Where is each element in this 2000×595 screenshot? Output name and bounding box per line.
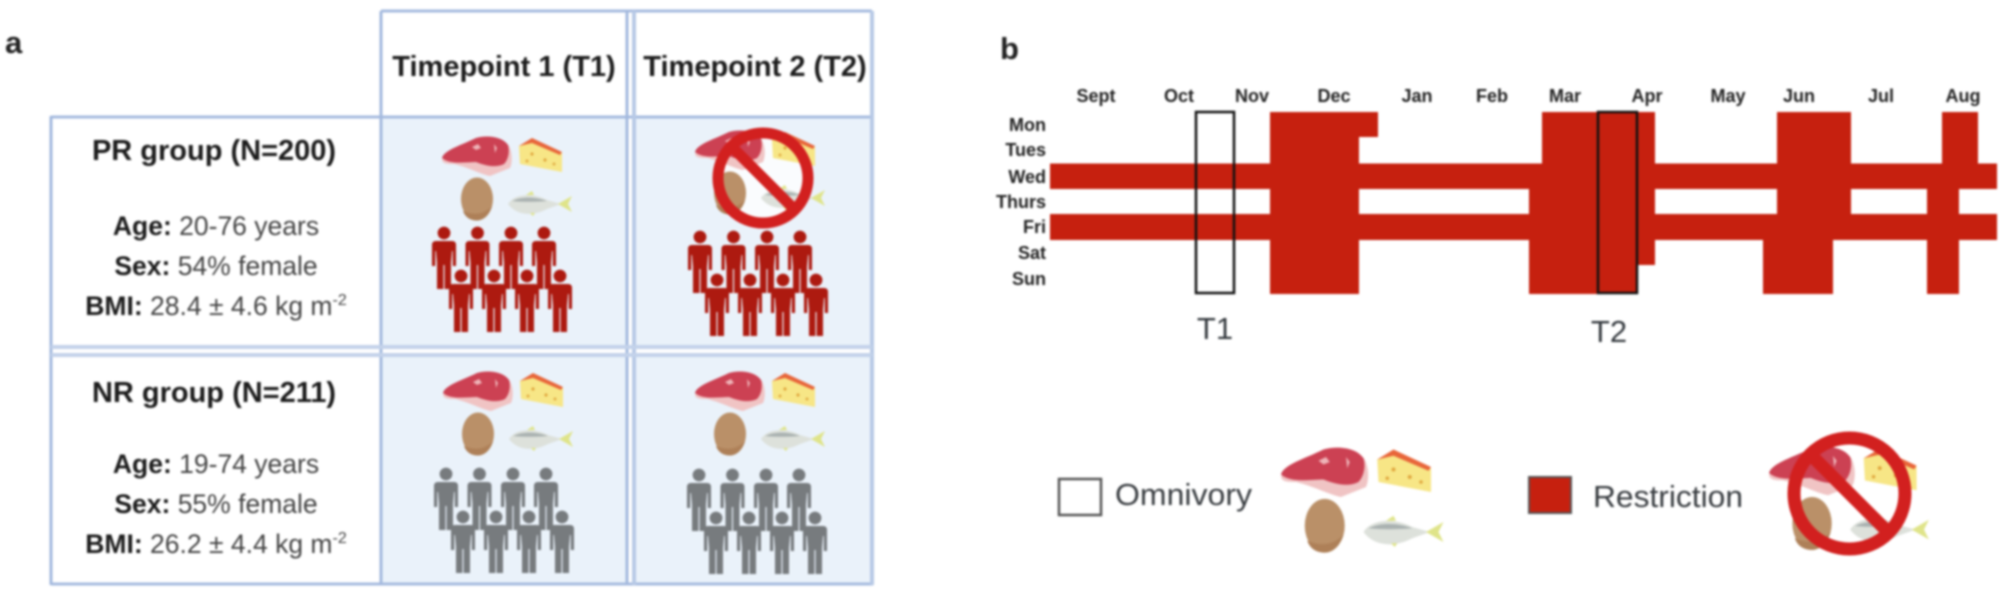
text block: NR group	[85, 377, 347, 559]
chart: restriction calendar blocks	[1050, 112, 1997, 294]
icon: red people, PR group at T2	[688, 231, 828, 336]
text block: NR group: -2	[333, 530, 347, 547]
T2 label: T2	[1591, 314, 1627, 349]
month labels: Jun	[1783, 86, 1815, 106]
icon: food, NR group at T2	[695, 371, 825, 456]
weekday labels	[996, 115, 1046, 289]
weekday labels: Mon	[1009, 115, 1046, 135]
icon: grey people, NR group at T2	[687, 469, 827, 574]
month labels: Jan	[1401, 86, 1433, 106]
T2 box	[1598, 112, 1637, 293]
panel a: study groups table	[5, 11, 873, 585]
legend label: omnivory: Omnivory	[1115, 477, 1253, 512]
T1 box	[1196, 112, 1234, 293]
icon: restricted food	[1769, 438, 1929, 550]
month labels: Jul	[1868, 86, 1894, 106]
weekday labels: Thurs	[996, 192, 1046, 212]
month labels: Aug	[1946, 86, 1980, 106]
icon: food, NR group at T1	[443, 371, 573, 456]
text block: PR group	[85, 135, 347, 321]
text block: PR group: PR group (N=200)	[92, 135, 336, 167]
panel label a: a	[5, 25, 23, 60]
weekday labels: Wed	[1008, 167, 1046, 187]
T1 label: T1	[1197, 311, 1233, 346]
legend swatch: restriction	[1529, 477, 1571, 513]
weekday labels: Sun	[1012, 269, 1046, 289]
icon: red people, PR group at T1	[432, 227, 572, 332]
month labels: Dec	[1317, 86, 1351, 106]
icon: restricted food, PR group at T2	[695, 130, 825, 224]
text block: NR group: NR group (N=211)	[92, 377, 336, 409]
legend	[1059, 438, 1929, 553]
text block: PR group: Age: 20-76 years	[113, 211, 319, 241]
table grid and cell fills	[51, 11, 873, 585]
month labels: Feb	[1476, 86, 1508, 106]
weekday labels: Fri	[1023, 217, 1046, 237]
panel label b: b	[1000, 31, 1019, 66]
weekday labels: Sat	[1018, 243, 1046, 263]
month labels: Oct	[1164, 86, 1194, 106]
icon: grey people, NR group at T1	[434, 468, 574, 573]
legend label: restriction: Restriction	[1593, 479, 1743, 514]
icon: food, PR group at T1	[442, 136, 572, 220]
month labels: Mar	[1549, 86, 1581, 106]
text block: PR group: BMI: 28.4 ± 4.6 kg m	[85, 291, 333, 321]
text block: NR group: BMI: 26.2 ± 4.4 kg m	[85, 529, 333, 559]
text block: NR group: Age: 19-74 years	[113, 449, 319, 479]
weekday labels: Tues	[1005, 140, 1046, 160]
month labels: Nov	[1235, 86, 1269, 106]
text block: NR group: Sex: 55% female	[114, 489, 318, 519]
heading: Timepoint 1: Timepoint 1 (T1)	[392, 51, 616, 83]
month labels: Apr	[1632, 86, 1662, 106]
panel b: restriction calendar	[996, 31, 1997, 349]
legend swatch: omnivory	[1059, 479, 1101, 515]
month labels	[1076, 86, 1980, 106]
text block: PR group: -2	[333, 292, 347, 309]
text block: PR group: Sex: 54% female	[114, 251, 318, 281]
month labels: Sept	[1076, 86, 1116, 106]
icon: food, omnivory	[1281, 448, 1444, 553]
heading: Timepoint 2: Timepoint 2 (T2)	[643, 51, 867, 83]
month labels: May	[1710, 86, 1746, 106]
